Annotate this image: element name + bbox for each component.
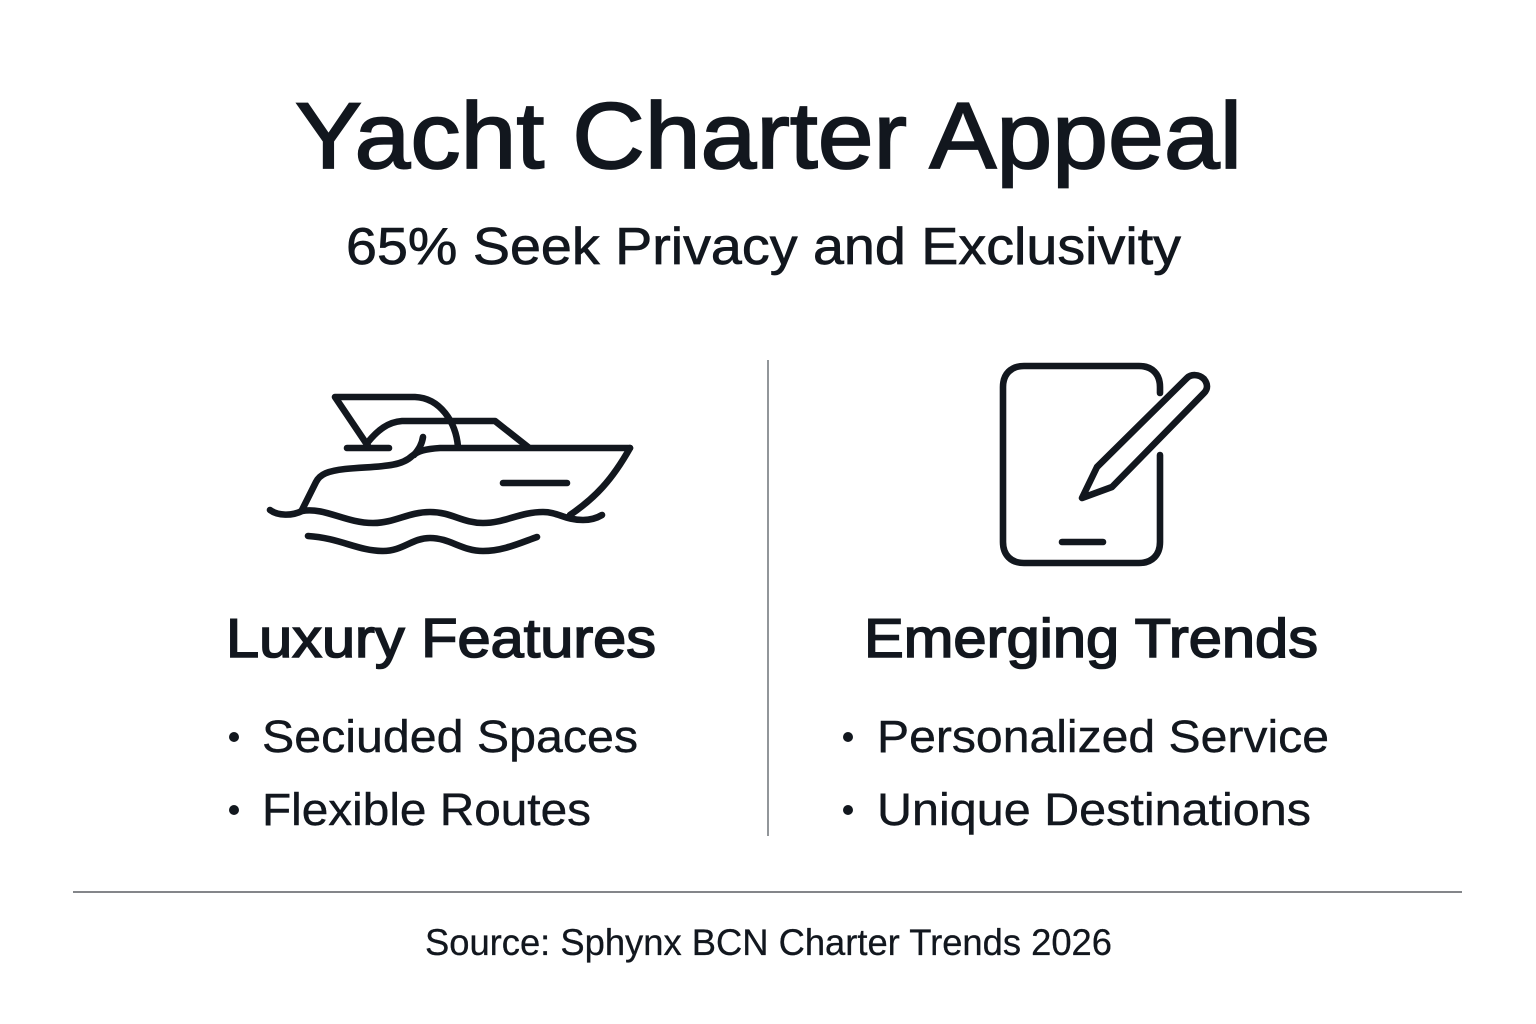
title: Yacht Charter Appeal (295, 83, 1242, 188)
list: emerging trends: Personalized Service (877, 711, 1329, 762)
subtitle: 65% Seek Privacy and Exclusivity (346, 218, 1181, 276)
heading: emerging trends: Emerging Trends (864, 607, 1318, 669)
heading: luxury features: Luxury Features (226, 607, 656, 669)
list: luxury features: Seciuded Spaces (262, 711, 638, 762)
panel: emerging trends (843, 366, 1329, 835)
list: emerging trends (843, 711, 1329, 835)
icon: yacht (270, 397, 630, 551)
panel: luxury features (226, 397, 656, 835)
list: luxury features (229, 711, 638, 835)
list: emerging trends: Unique Destinations (877, 784, 1311, 835)
list: luxury features: Flexible Routes (262, 784, 591, 835)
icon: tablet and pen (1003, 366, 1207, 563)
source note: Source: Sphynx BCN Charter Trends 2026 (425, 922, 1112, 963)
